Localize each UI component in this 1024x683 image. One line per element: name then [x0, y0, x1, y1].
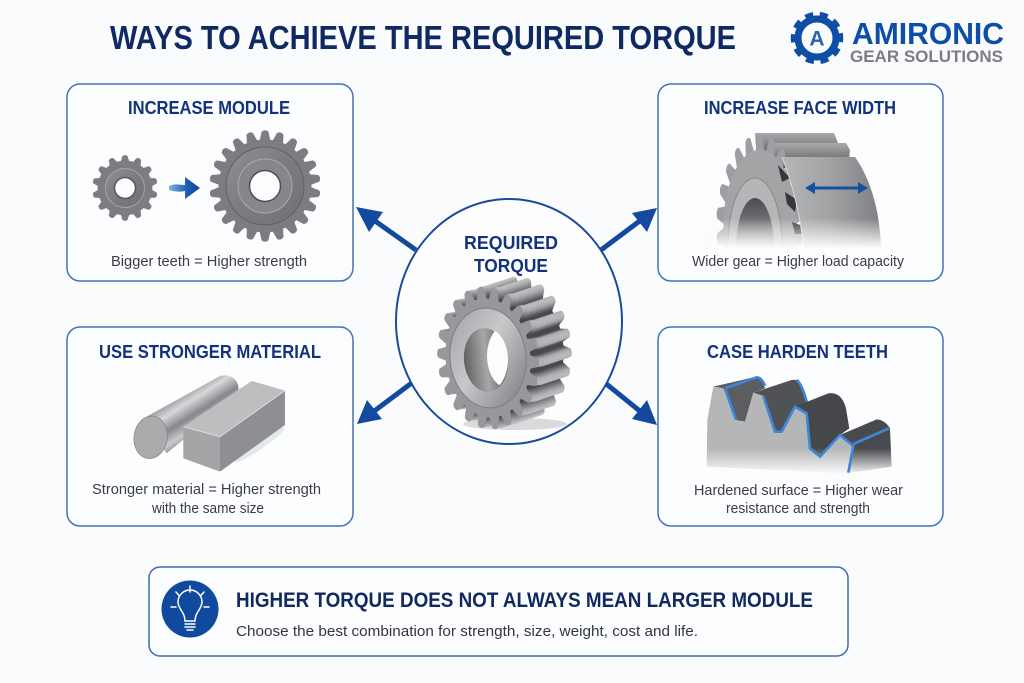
- logo name: AMIRONIC: [852, 16, 1004, 51]
- icon: light bulb: [162, 580, 218, 638]
- takeaway heading: HIGHER TORQUE DOES NOT ALWAYS MEAN LARGER MODULE: [236, 589, 813, 612]
- heading line 2: TORQUE: [474, 255, 548, 276]
- arrow: to case harden: [604, 382, 657, 425]
- arrow: width: [805, 182, 868, 194]
- illustration: steel bar and block: [131, 375, 287, 472]
- arrow: to stronger material: [357, 382, 413, 424]
- heading: USE STRONGER MATERIAL: [99, 341, 321, 362]
- logo: Amironic Gear Solutions: [794, 14, 1004, 66]
- title: WAYS TO ACHIEVE THE REQUIRED TORQUE: [110, 19, 736, 56]
- caption line 2: resistance and strength: [726, 501, 870, 517]
- illustration: main gear: [437, 276, 572, 430]
- arrow: to increase module: [356, 207, 416, 250]
- heading: INCREASE FACE WIDTH: [704, 97, 896, 118]
- logo tagline: GEAR SOLUTIONS: [850, 47, 1003, 66]
- caption: Bigger teeth = Higher strength: [111, 254, 307, 270]
- icon: logo gear: A: [809, 28, 825, 50]
- panel: key takeaway: [149, 567, 848, 656]
- takeaway text: Choose the best combination for strength, size, weight, cost and life.: [236, 623, 698, 640]
- panel: case harden teeth: [658, 327, 943, 526]
- arrow: to increase face width: [601, 208, 657, 250]
- illustration: hardened teeth: [705, 377, 895, 475]
- caption: Wider gear = Higher load capacity: [692, 254, 905, 270]
- panel: use stronger material: [67, 327, 353, 526]
- icon: large gear: [209, 130, 321, 242]
- panel: required torque circle: [396, 199, 622, 444]
- icon: small gear: [92, 155, 158, 221]
- heading: CASE HARDEN TEETH: [707, 341, 888, 362]
- panel: increase face width: [657, 83, 944, 282]
- arrow: small to large: [169, 177, 200, 199]
- caption: Stronger material = Higher strength: [92, 482, 321, 498]
- caption line 2: with the same size: [151, 501, 264, 517]
- caption: Hardened surface = Higher wear: [694, 483, 903, 499]
- icon: logo gear: [794, 14, 840, 62]
- heading: INCREASE MODULE: [128, 97, 290, 118]
- illustration: wide gear: [716, 133, 881, 246]
- panel: increase module: [67, 84, 353, 281]
- heading: REQUIRED: [464, 232, 558, 253]
